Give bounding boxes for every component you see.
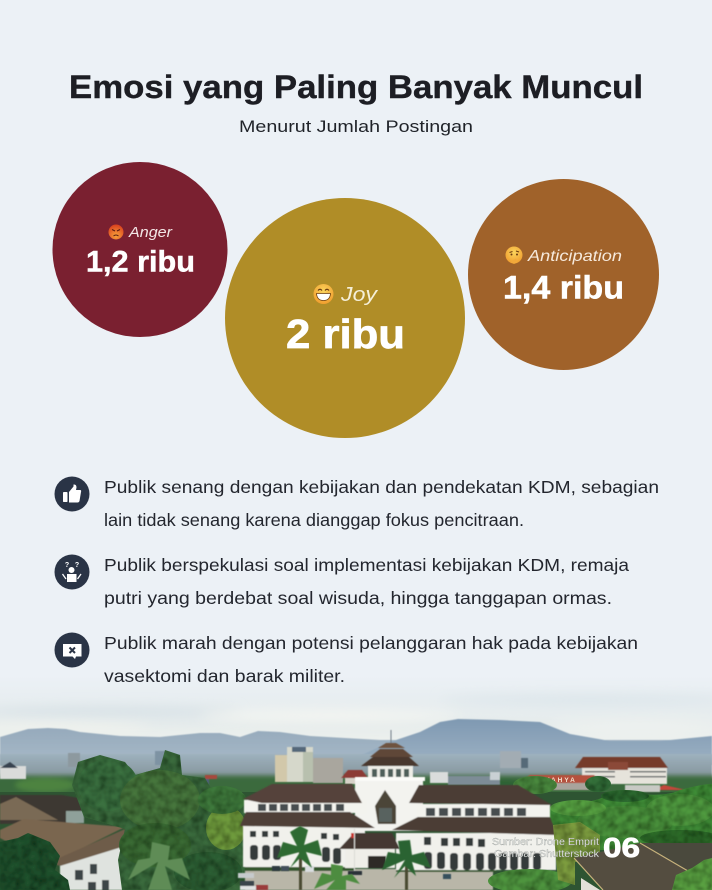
text: point 3: Publik marah dengan potensi pelanggaran hak pada kebijakan — [104, 633, 638, 653]
photo: Gedung Sate and Bandung skyline — [0, 675, 712, 890]
foreground tree bottom right — [672, 858, 712, 890]
central gable — [375, 790, 396, 824]
parked cars — [238, 866, 451, 890]
label: Anticipation: Anticipation — [527, 248, 622, 265]
text: point 2 — [104, 555, 629, 608]
icon: thumbs up — [54, 476, 90, 512]
upper floor walls — [244, 800, 366, 813]
hedge — [245, 866, 355, 871]
ground floor walls — [243, 826, 365, 867]
photo backing — [0, 792, 712, 890]
icon: confused person: ? — [65, 562, 69, 569]
YAHYA sign text: YAHYA — [545, 777, 577, 784]
icon: thinking emoji — [506, 246, 522, 264]
source credit — [492, 836, 600, 860]
foreground dark tree — [0, 833, 70, 890]
middle roofs — [240, 812, 375, 828]
value: 1,4 ribu: 1,4 ribu — [503, 270, 624, 306]
right trees — [513, 776, 712, 850]
text: point 3: vasektomi dan barak militer. — [104, 666, 345, 686]
distant green belt — [0, 776, 712, 806]
label: Anger: Anger — [128, 224, 173, 241]
bubble: Anticipation — [468, 179, 659, 370]
subtitle: Menurut Jumlah Postingan — [239, 117, 473, 136]
icon: angry emoji — [108, 224, 124, 240]
entrance porch — [345, 849, 395, 868]
icon: confused person: ? — [75, 562, 79, 569]
point 1: senang — [54, 476, 659, 530]
mountains — [0, 719, 712, 765]
palm trees — [128, 826, 431, 890]
text: point 2: putri yang berdebat soal wisuda, hingga tanggapan ormas. — [104, 588, 612, 608]
upper roofs — [243, 784, 362, 803]
lower windows and arches — [250, 831, 541, 870]
bubble: Anger — [52, 162, 228, 337]
big central-left tree — [72, 750, 246, 890]
source credit: Gambar: Shutterstock — [494, 848, 600, 860]
page number: 06 — [603, 832, 640, 863]
text: point 1 — [104, 477, 659, 530]
icon: confused person — [54, 554, 90, 590]
bubble: Joy — [225, 198, 465, 438]
pagoda roofs — [378, 743, 405, 748]
value: 1,2 ribu: 1,2 ribu — [86, 246, 195, 278]
left roofs — [0, 795, 125, 890]
foreground shrubs — [488, 822, 600, 890]
text: point 1: lain tidak senang karena dianggap fokus pencitraan. — [104, 510, 524, 530]
sky with clouds — [0, 675, 712, 765]
foreground roof right — [574, 843, 712, 890]
distant city haze — [0, 754, 712, 784]
title: Emosi yang Paling Banyak Muncul — [69, 69, 643, 105]
point 3: marah — [54, 632, 638, 686]
point 2: spekulasi — [54, 554, 629, 608]
Gedung Sate building — [240, 730, 557, 890]
distant buildings — [0, 747, 686, 792]
label: Joy: Joy — [340, 284, 378, 306]
icon: grinning emoji — [314, 284, 334, 304]
icon: speech box with cross — [54, 632, 90, 668]
courtyard ground — [245, 869, 493, 890]
value: 2 ribu: 2 ribu — [286, 311, 405, 357]
central tower — [355, 779, 423, 831]
source credit: Sumber: Drone Emprit — [492, 836, 599, 848]
text: point 3 — [104, 633, 638, 686]
text: point 2: Publik berspekulasi soal implementasi kebijakan KDM, remaja — [104, 555, 629, 575]
text: point 1: Publik senang dengan kebijakan dan pendekatan KDM, sebagian — [104, 477, 659, 497]
upper windows — [258, 804, 526, 816]
